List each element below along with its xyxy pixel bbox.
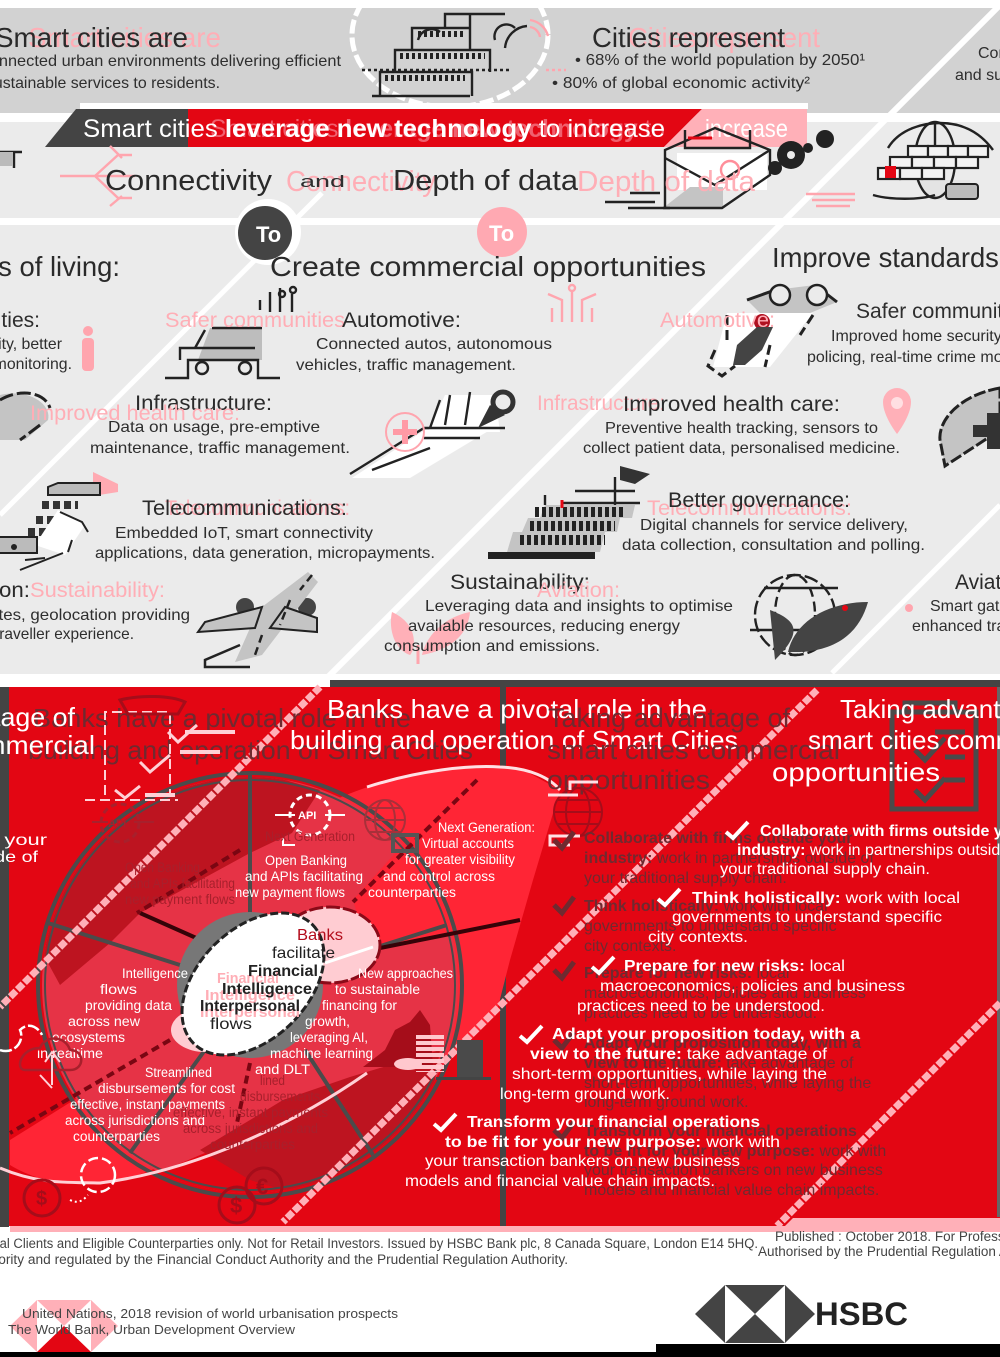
logo: HSBC dark: HSBC xyxy=(815,1296,908,1332)
icon: connected car xyxy=(165,287,296,378)
text: open banking: new payment flows xyxy=(235,885,345,900)
badge: To dark xyxy=(235,199,301,265)
icon: globe with brick wall xyxy=(873,122,993,200)
icon: monitor edge xyxy=(0,152,22,168)
heading: Taking advantage (ghost): opportunities xyxy=(547,765,710,795)
item: Telecommunications xyxy=(95,497,852,562)
wheel muted disc xyxy=(42,777,458,1193)
text: hub label: flows xyxy=(210,1016,252,1033)
text: footnotes xyxy=(8,1306,399,1337)
list: ghost action points: practices need to be understood. xyxy=(584,1005,817,1022)
heading: Taking advantage (ghost): smart cities commercial xyxy=(547,735,840,765)
heading: Cities represent: Cities represent xyxy=(628,22,820,53)
list: white action points: Think holistically: work with local xyxy=(692,890,960,907)
text: smart cities definition xyxy=(0,45,1000,92)
list: white action points xyxy=(405,823,1000,1190)
item: Better governance: Digital channels for service delivery, xyxy=(640,517,908,534)
icon: pink data hub xyxy=(548,285,596,322)
text: streamlined disbursements: disbursements for cost xyxy=(98,1081,235,1096)
text: hub label xyxy=(200,927,343,1033)
list: white action points: your transaction bankers on new business xyxy=(425,1153,740,1170)
heading: Taking advantage (ghost) xyxy=(547,703,840,795)
list: ghost action points: long-term ground work. xyxy=(584,1094,749,1111)
list: white action points: long-term ground work. xyxy=(500,1086,670,1103)
text: ghost lower wheel copy: counterparties xyxy=(210,1137,295,1152)
icon: shield with person xyxy=(708,285,837,376)
list: ghost action points: city contexts. xyxy=(584,938,676,955)
text: hub label: Financial xyxy=(248,963,318,980)
text: intelligence flows: providing data xyxy=(85,998,173,1013)
item: Sustainability: Sustainability: xyxy=(450,571,590,594)
text: legal disclaimer left xyxy=(0,1236,758,1267)
text: footnotes: The World Bank, Urban Development Overview xyxy=(8,1322,296,1337)
item: Improved health care: Improved health care: xyxy=(623,393,840,416)
badge: To pink: To xyxy=(489,221,514,246)
list: white action points: city contexts. xyxy=(648,929,748,946)
icon: API gear xyxy=(275,795,345,845)
icon: API gear ghost: API xyxy=(108,818,126,830)
icon: API gear ghost xyxy=(92,804,154,842)
heading: Connectivity and Depth of data: Depth of data xyxy=(393,165,579,197)
banner: leverage new technology xyxy=(45,103,808,147)
item: Improved health care: Preventive health tracking, sensors to xyxy=(605,420,878,437)
icon: dark clipboard xyxy=(892,703,976,809)
panel: red banks section xyxy=(0,680,1000,1232)
list: white action points: Adapt your proposition today, with a xyxy=(552,1026,860,1043)
icon: health location pin xyxy=(940,388,1000,466)
icon: dollar and euro coins xyxy=(219,1168,282,1223)
text: hub label: facilitate xyxy=(272,945,335,962)
badge: To pink xyxy=(477,207,527,257)
icon: pink map pin xyxy=(883,388,911,434)
icon: airplane xyxy=(198,572,318,667)
heading: Banks have a pivotal role: building and operation of Smart Cities xyxy=(290,725,738,755)
heading: Banks have a pivotal role (ghost): Banks have a pivotal role in the xyxy=(33,703,411,733)
heading: Improve standards of living xyxy=(0,242,1000,282)
item: Safer communities xyxy=(0,300,1000,373)
heading: Banks have a pivotal role (ghost) xyxy=(28,703,473,765)
text: intelligence flows: across new xyxy=(68,1014,140,1029)
text: open banking ghost: and APIs facilitating xyxy=(130,876,235,891)
text: city statistics: • 80% of global economic activity² xyxy=(552,75,811,92)
text: intelligence flows: ecosystems xyxy=(52,1030,125,1045)
list: white action points: Transform your financial operations xyxy=(467,1114,760,1131)
icons: white check marks xyxy=(434,822,748,1130)
list: ghost action points: your transaction bankers on new business xyxy=(584,1162,883,1179)
text: streamlined disbursements: across jurisdictions and xyxy=(65,1113,205,1128)
icons: ghost check marks xyxy=(554,832,574,1138)
list: ghost action points: to be fit for your new purpose: work with xyxy=(584,1143,886,1160)
item: Infrastructure: Infrastructure: xyxy=(135,392,272,415)
text: intelligence flows: flows xyxy=(100,982,137,997)
heading: Connectivity and Depth of data: and xyxy=(300,172,345,191)
text: new approaches: New approaches xyxy=(358,966,453,981)
item: Aviation xyxy=(0,571,1000,643)
item: Telecommunications: Embedded IoT, smart connectivity xyxy=(115,525,373,542)
heading: Banks have a pivotal role xyxy=(290,694,738,755)
icon: API gear: API xyxy=(298,810,316,822)
icon: globe white with bracket xyxy=(548,782,602,845)
item: Better governance xyxy=(622,489,925,554)
icon: buildings with coins xyxy=(363,1010,491,1080)
panel: light grey second band xyxy=(0,122,1000,218)
text: next generation: counterparties xyxy=(368,885,456,900)
text: open banking ghost: new payment flows xyxy=(125,892,235,907)
icon: ghost coin swirl: $ xyxy=(36,1188,47,1210)
text: streamlined disbursements xyxy=(65,1065,235,1144)
text: open banking ghost: Open Banking xyxy=(125,860,200,875)
list: white action points: to be fit for your new purpose: work with xyxy=(445,1134,780,1151)
icon: globe with dark leaf xyxy=(750,575,868,660)
list: white action points: your traditional supply chain. xyxy=(720,861,930,878)
heading: Taking advantage (ghost): Taking advantage of xyxy=(548,703,790,733)
text: streamlined disbursements: effective, instant payments xyxy=(70,1097,225,1112)
list: ghost action points: macroeconomics, policies and business xyxy=(584,985,866,1002)
text: streamlined disbursements: Streamlined xyxy=(145,1065,212,1080)
list: ghost action points: Transform your financial operations xyxy=(584,1123,857,1140)
list: ghost action points: Think holistically: work with local xyxy=(584,898,828,915)
text: hub label: Banks xyxy=(297,927,343,944)
text: next generation: Next Generation: xyxy=(438,820,535,835)
heading: Create commercial opportunities: Create commercial opportunities xyxy=(270,251,706,282)
text: new approaches: growth, xyxy=(305,1014,350,1029)
banner: leverage new technology: Smart cities leverage new technology to xyxy=(210,115,665,143)
icon: pink leaves xyxy=(391,612,470,664)
icon: ghost coin swirl xyxy=(24,1158,115,1216)
text: open banking xyxy=(235,853,363,900)
text: hub label: Intelligence xyxy=(222,981,312,998)
text: ghost lower wheel copy: effective, instant payments xyxy=(173,1105,328,1120)
item: Automotive xyxy=(296,309,775,374)
item: Automotive: Connected autos, autonomous xyxy=(316,336,552,353)
item: Improved health care xyxy=(30,393,900,457)
ghost heading: Depth of data: Depth of data xyxy=(577,166,756,198)
list: ghost action points: Adapt your proposition today, with a xyxy=(584,1035,861,1052)
wheel hub xyxy=(177,912,323,1058)
icon: envelope with gear xyxy=(605,128,855,208)
item: Automotive: Automotive: xyxy=(660,309,775,332)
heading: Smart cities are: Smart cities are xyxy=(0,22,188,53)
text: legal disclaimer right xyxy=(758,1229,1000,1259)
item: Telecommunications: applications, data generation, micropayments. xyxy=(95,545,435,562)
text: new approaches: machine learning xyxy=(270,1046,373,1061)
hub pale lower blob xyxy=(171,1008,239,1052)
list: white action points: short-term opportunities, while laying the xyxy=(512,1066,827,1083)
text: next generation: and control across xyxy=(383,869,495,884)
item: Better governance: Better governance: xyxy=(668,489,850,512)
text: city statistics xyxy=(552,52,865,92)
text: new approaches: financing for xyxy=(322,998,398,1013)
hub pale upper blob xyxy=(280,907,380,983)
dark dashed seams xyxy=(10,780,477,1133)
list: ghost action points: view to the future: take advantage of xyxy=(584,1055,854,1072)
diagonal seams on grey area xyxy=(0,5,1000,677)
text: ghost lower wheel copy xyxy=(173,1073,328,1152)
text: hub label: Interpersonal xyxy=(200,998,300,1015)
list: ghost action points: governments to understand specific xyxy=(584,918,837,935)
text: intelligence flows: in realtime xyxy=(37,1046,103,1061)
list: white action points: Prepare for new risks: local xyxy=(624,958,845,975)
logo: HSBC dark xyxy=(695,1285,908,1343)
icon: cloud with arrows xyxy=(0,1026,81,1088)
text: next generation: Virtual accounts xyxy=(422,836,514,851)
heading: Connectivity and Depth of data xyxy=(105,165,579,198)
list: white action points: governments to understand specific xyxy=(672,909,942,926)
list: white action points: models and financial value chain impacts. xyxy=(405,1173,715,1190)
wheel dark wedge bottom xyxy=(200,1050,440,1195)
text: hub ghost label: Financial xyxy=(217,970,279,987)
item: Sustainability xyxy=(30,571,733,655)
heading: Connectivity and Depth of data: Connectivity xyxy=(105,165,273,197)
text: ghost lower wheel copy: across jurisdictions and xyxy=(183,1121,318,1136)
item: Aviation: Aviation: xyxy=(537,579,620,602)
wheel bright offset layer xyxy=(330,765,560,1090)
text: footnotes: United Nations, 2018 revision of world urbanisation prospects xyxy=(22,1306,399,1321)
badge: To dark: To xyxy=(256,222,281,247)
item: Sustainability: Leveraging data and insights to optimise xyxy=(425,598,733,615)
icon: globe ghost xyxy=(365,800,417,851)
item: Better governance: data collection, consultation and polling. xyxy=(622,537,925,554)
list: white action points: macroeconomics, policies and business xyxy=(600,978,905,995)
item: Automotive: Automotive: xyxy=(342,309,461,332)
text: new approaches: to sustainable xyxy=(335,982,420,997)
wheel lower pale arc xyxy=(0,1073,367,1183)
wheel bright lower-left band xyxy=(10,1040,190,1184)
heading: Banks have a pivotal role (ghost): building and operation of Smart Cities xyxy=(28,735,473,765)
list: ghost action points: Collaborate with firms outside your xyxy=(584,830,852,847)
item: Infrastructure: maintenance, traffic management. xyxy=(90,440,350,457)
item: Safer communities: Safer communities xyxy=(165,309,345,332)
strip: bottom black edge xyxy=(0,1344,1000,1357)
heading: Banks have a pivotal role: Banks have a pivotal role in the xyxy=(327,694,707,724)
banner: leverage new technology: increase xyxy=(705,115,788,143)
wheel dark second spokes xyxy=(140,913,520,953)
list: white action points: view to the future: take advantage of xyxy=(530,1046,828,1063)
icon: dollar and euro coins: € xyxy=(256,1174,268,1199)
item: Telecommunications: Telecommunications: xyxy=(142,497,347,520)
icon: clipboard with checks xyxy=(85,696,235,800)
wheel dark wedge top-left xyxy=(30,770,320,985)
text: streamlined disbursements: counterparties xyxy=(73,1129,160,1144)
list: ghost action points: models and financial value chain impacts. xyxy=(584,1182,879,1199)
item: Sustainability: Sustainability: xyxy=(30,579,165,602)
wheel white outer arc xyxy=(367,767,560,790)
list: ghost action points: industry: work in partnerships outside of xyxy=(584,850,874,867)
text: new approaches xyxy=(255,966,453,1077)
item: Telecommunications: Telecommunications: xyxy=(647,497,852,520)
icon: left heart pin edge xyxy=(0,393,50,440)
icon: government building with flag xyxy=(488,466,650,559)
diagonal seams on red area xyxy=(0,687,1000,1226)
item: Sustainability: consumption and emissions. xyxy=(384,638,600,655)
heading: Connectivity and Depth of data: Connectivity xyxy=(286,166,436,198)
text: open banking: Open Banking xyxy=(265,853,347,868)
icon: pink person xyxy=(82,326,94,371)
item: Improved health care: collect patient data, personalised medicine. xyxy=(583,440,900,457)
text: hub ghost label: Intelligence xyxy=(205,987,295,1004)
item: Infrastructure: Data on usage, pre-emptive xyxy=(108,419,320,436)
list: ghost action points: Prepare for new risks: local xyxy=(584,965,789,982)
heading: Cities represent: Cities represent xyxy=(592,22,785,53)
item: Telecommunications: Telecommunications: xyxy=(165,497,350,520)
heading: Smart cities are: Smart cities are xyxy=(28,22,221,53)
text: new approaches: and DLT xyxy=(255,1062,310,1077)
text: intelligence flows xyxy=(37,966,188,1061)
text: left edge wrap copy xyxy=(0,832,48,866)
list: ghost action points: your traditional supply chain. xyxy=(584,870,787,887)
text: next generation ghost: Next Generation xyxy=(265,829,355,844)
item: Infrastructure: Infrastructure: xyxy=(537,392,665,415)
banner: leverage new technology: Smart cities leverage new technology to increase xyxy=(83,115,665,143)
text: hub ghost label xyxy=(200,970,300,1021)
icon: dollar and euro coins: $ xyxy=(230,1193,242,1218)
text: open banking: and APIs facilitating xyxy=(245,869,363,884)
heading: Taking advantage: opportunities xyxy=(772,757,940,787)
list: ghost action points: short-term opportunities, while laying the xyxy=(584,1075,871,1092)
wheel red below lower arc xyxy=(160,1153,284,1193)
item: Automotive: vehicles, traffic management. xyxy=(296,357,516,374)
list: ghost action points xyxy=(584,830,886,1199)
text: ghost lower wheel copy: lined xyxy=(260,1073,285,1088)
logo: pink HSBC hexagon xyxy=(10,1300,118,1352)
text: next generation xyxy=(368,820,535,900)
item: Improved health care: Improved health care: xyxy=(30,402,240,425)
icon: road and target xyxy=(350,392,513,478)
text: intelligence flows: Intelligence xyxy=(122,966,188,981)
text: hub ghost label: Interpersonal xyxy=(200,1004,300,1021)
icon: city building with wifi xyxy=(362,14,566,96)
heading: Taking advantage xyxy=(0,694,1000,787)
wheel rings and spokes xyxy=(38,773,462,1197)
panel: top grey band xyxy=(0,0,1000,113)
chart: five segment wheel xyxy=(0,765,560,1230)
wheel white spoke glint xyxy=(325,947,373,963)
hub white lens xyxy=(155,886,351,1082)
icon: hand with phone and flag xyxy=(0,472,118,570)
wheel bright upper-right sector xyxy=(354,844,451,944)
item: Infrastructure xyxy=(90,392,665,457)
icon: pink branching arrows xyxy=(60,146,135,206)
item: Sustainability: available resources, reducing energy xyxy=(408,618,680,635)
text: next generation: for greater visibility xyxy=(405,852,515,867)
list: white action points: practices need to be understood. xyxy=(577,998,825,1015)
text: ghost lower wheel copy: disbursements xyxy=(240,1089,320,1104)
text: new approaches: leveraging AI, xyxy=(290,1030,368,1045)
text: city statistics: • 68% of the world population by 2050¹ xyxy=(575,52,865,69)
panel: light grey objectives band xyxy=(0,225,1000,674)
text: open banking ghost xyxy=(125,860,235,907)
